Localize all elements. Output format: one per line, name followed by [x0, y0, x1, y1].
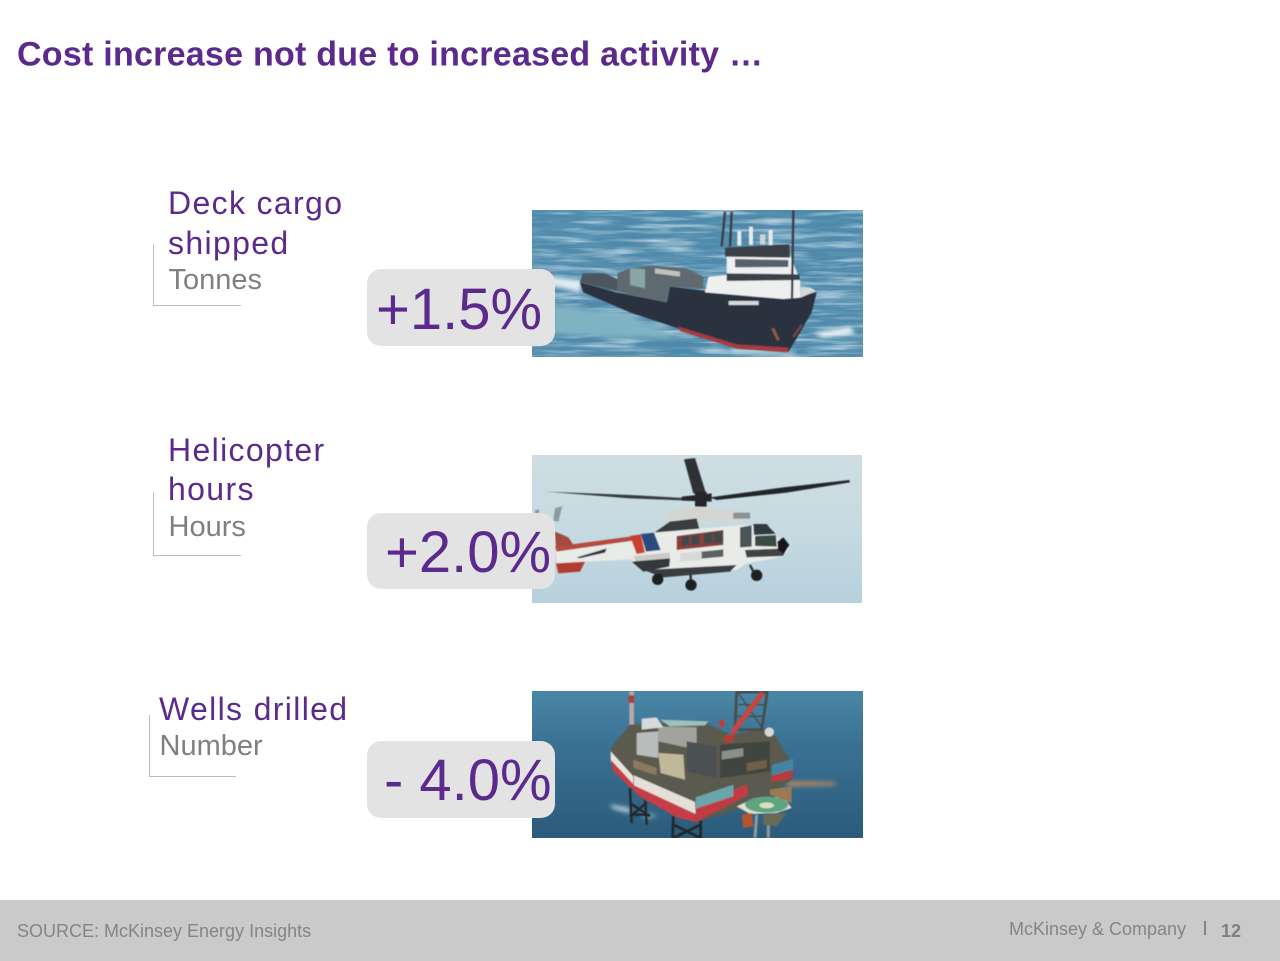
- photo: supply ship at sea: [532, 210, 863, 357]
- value: - 4.0%: [384, 748, 552, 813]
- source note: SOURCE: McKinsey Energy Insights: [17, 921, 311, 941]
- unit: Hours: [168, 511, 246, 543]
- company name: McKinsey & Company: [1009, 919, 1186, 939]
- unit: Tonnes: [168, 264, 262, 296]
- page number: 12: [1221, 921, 1241, 941]
- value: +2.0%: [385, 520, 551, 585]
- metric label: Deck cargo: [168, 185, 343, 221]
- photo: jack-up drilling rig: [532, 691, 863, 838]
- bracket: [154, 244, 241, 306]
- value: +1.5%: [376, 277, 542, 342]
- metric label: Wells drilled: [159, 691, 348, 727]
- title: Cost increase not due to increased activity …: [17, 36, 763, 74]
- bracket: [150, 715, 236, 776]
- photo: offshore helicopter in flight: [532, 455, 862, 603]
- row 2: helicopter hours: [154, 432, 555, 589]
- metric label line 2: shipped: [168, 225, 290, 261]
- footer bar: [0, 900, 1280, 961]
- value pill: [367, 513, 555, 589]
- row 3: wells drilled: [150, 691, 555, 818]
- row 1: deck cargo: [154, 185, 555, 346]
- value pill: [367, 269, 555, 346]
- unit: Number: [160, 730, 263, 762]
- metric label line 2: hours: [168, 471, 255, 507]
- value pill: [367, 741, 555, 818]
- bracket: [154, 492, 241, 556]
- metric label: Helicopter: [168, 432, 326, 468]
